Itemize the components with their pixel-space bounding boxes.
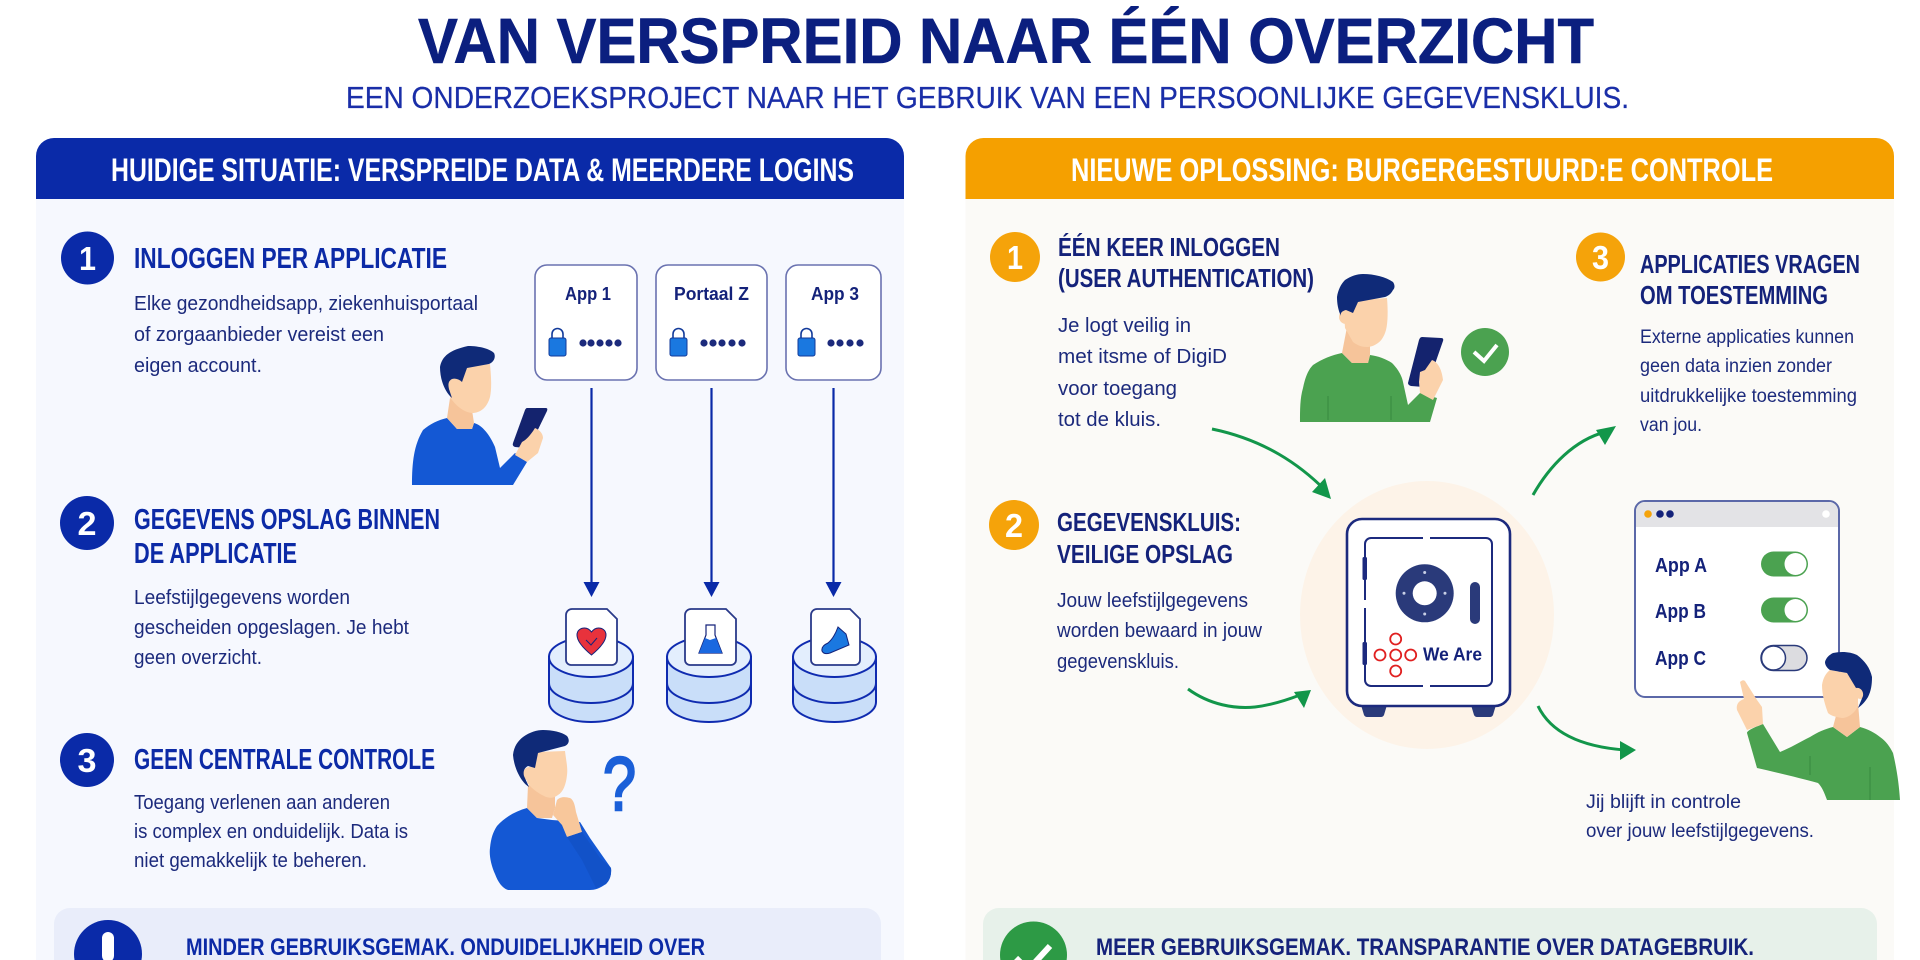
toggle: App C: App C xyxy=(1655,648,1706,670)
browser window with toggles xyxy=(1635,501,1839,697)
step 2: gegevenskluis: worden bewaard in jouw xyxy=(1056,620,1263,642)
step 3: applicaties vragen om toestemming: uitdrukkelijke toestemming xyxy=(1640,386,1857,407)
step 1: inloggen per applicatie: INLOGGEN PER APPLICATIE xyxy=(134,243,447,275)
step 2: gegevenskluis: Jouw leefstijlgegevens xyxy=(1057,590,1248,612)
step 2: gegevenskluis: 2 xyxy=(1005,507,1023,544)
step 3: applicaties vragen om toestemming: van jou. xyxy=(1640,415,1702,436)
step 3: geen centrale controle: Toegang verlenen aan anderen xyxy=(134,792,390,814)
step 1: één keer inloggen: voor toegang xyxy=(1058,378,1177,400)
toggle: App B xyxy=(1655,598,1808,623)
step 1: inloggen per applicatie: eigen account. xyxy=(134,355,262,377)
arrow: app 1 to database xyxy=(584,388,600,597)
step 1: inloggen per applicatie: 1 xyxy=(79,240,96,277)
icon: person with phone, green xyxy=(1300,274,1443,422)
step 2: gegevens opslag: 2 xyxy=(78,505,96,542)
panel header: huidige situatie: HUIDIGE SITUATIE: VERSPREIDE DATA & MEERDERE LOGINS xyxy=(111,152,854,188)
app card 2 xyxy=(656,265,767,380)
step 3: geen centrale controle: niet gemakkelijk te beheren. xyxy=(134,850,367,872)
step 1: inloggen per applicatie: Elke gezondheidsapp, ziekenhuisportaal xyxy=(134,293,478,315)
arrow: app 3 to database xyxy=(826,388,842,597)
step 2: gegevenskluis xyxy=(989,500,1263,673)
step 3: geen centrale controle xyxy=(60,733,435,872)
step 3: geen centrale controle: GEEN CENTRALE CONTROLE xyxy=(134,744,435,776)
callout: minder gebruiksgemak xyxy=(54,908,881,960)
step 2: gegevens opslag: Leefstijlgegevens worden xyxy=(134,587,350,609)
icon: green check badge xyxy=(1461,328,1509,376)
step 3: applicaties vragen om toestemming xyxy=(1576,232,1860,436)
step 1: één keer inloggen: ÉÉN KEER INLOGGEN xyxy=(1058,232,1280,262)
step 2: gegevens opslag: geen overzicht. xyxy=(134,647,262,669)
app card 1: App 1 xyxy=(565,284,611,304)
arrow: login to vault xyxy=(1212,429,1331,499)
vault glow xyxy=(1300,481,1554,749)
text: jij blijft in controle: Jij blijft in controle xyxy=(1586,792,1741,813)
step 2: gegevens opslag xyxy=(60,496,440,669)
step 2: gegevenskluis: gegevenskluis. xyxy=(1057,651,1179,673)
title: VAN VERSPREID NAAR ÉÉN OVERZICHT xyxy=(418,5,1594,77)
subtitle: EEN ONDERZOEKSPROJECT NAAR HET GEBRUIK VAN EEN PERSOONLIJKE GEGEVENSKLUIS. xyxy=(346,80,1629,115)
step 3: applicaties vragen om toestemming: OM TOESTEMMING xyxy=(1640,280,1828,310)
icon: question mark: ? xyxy=(603,742,636,827)
step 1: één keer inloggen: 1 xyxy=(1007,239,1023,276)
step 1: inloggen per applicatie: of zorgaanbieder vereist een xyxy=(134,324,384,346)
arrow: vault to control xyxy=(1538,706,1636,760)
panel: nieuwe oplossing xyxy=(966,138,1900,960)
icon: person pointing xyxy=(1737,652,1900,800)
app card 3 xyxy=(786,265,881,380)
icon: vault xyxy=(1347,519,1510,717)
logo: We Are: We Are xyxy=(1423,644,1482,664)
database with flask file xyxy=(667,609,751,722)
icon: person with phone xyxy=(412,346,547,485)
step 1: één keer inloggen: (USER AUTHENTICATION) xyxy=(1058,263,1314,293)
arrow: vault to applications xyxy=(1533,426,1616,495)
step 2: gegevenskluis: VEILIGE OPSLAG xyxy=(1057,539,1233,569)
text: jij blijft in controle: over jouw leefstijlgegevens. xyxy=(1586,821,1814,842)
text: jij blijft in controle xyxy=(1586,792,1814,842)
panel: huidige situatie xyxy=(36,138,904,960)
database with heart file xyxy=(549,609,633,722)
step 3: geen centrale controle: is complex en onduidelijk. Data is xyxy=(134,821,408,843)
toggle: App B: App B xyxy=(1655,601,1706,623)
toggle: App A xyxy=(1655,552,1808,577)
database with shoe file xyxy=(793,609,876,722)
callout: meer gebruiksgemak xyxy=(983,908,1877,960)
panel header: nieuwe oplossing xyxy=(966,138,1894,199)
step 2: gegevenskluis: GEGEVENSKLUIS: xyxy=(1057,507,1241,537)
toggle: App A: App A xyxy=(1655,555,1707,577)
step 3: geen centrale controle: 3 xyxy=(78,742,96,779)
step 1: inloggen per applicatie xyxy=(61,232,478,377)
step 1: één keer inloggen: met itsme of DigiD xyxy=(1058,346,1227,368)
step 3: applicaties vragen om toestemming: geen data inzien zonder xyxy=(1640,356,1833,377)
step 3: applicaties vragen om toestemming: APPLICATIES VRAGEN xyxy=(1640,249,1860,279)
step 2: gegevens opslag: DE APPLICATIE xyxy=(134,538,297,570)
app card 2: Portaal Z xyxy=(674,284,749,304)
step 1: één keer inloggen xyxy=(990,232,1314,431)
arrow: storage to vault xyxy=(1188,689,1311,708)
step 3: applicaties vragen om toestemming: 3 xyxy=(1592,239,1609,276)
toggle: App C xyxy=(1655,646,1807,670)
step 1: één keer inloggen: tot de kluis. xyxy=(1058,409,1161,431)
step 1: één keer inloggen: Je logt veilig in xyxy=(1058,315,1191,337)
app card 1 xyxy=(535,265,637,380)
panel header: huidige situatie xyxy=(36,138,904,199)
step 2: gegevens opslag: GEGEVENS OPSLAG BINNEN xyxy=(134,504,440,536)
step 3: applicaties vragen om toestemming: Externe applicaties kunnen xyxy=(1640,327,1854,348)
icon: thinking person xyxy=(490,730,611,890)
step 2: gegevens opslag: gescheiden opgeslagen. Je hebt xyxy=(134,617,409,639)
logo: We Are xyxy=(1374,634,1482,676)
app card 3: App 3 xyxy=(811,284,859,304)
arrow: portaal to database xyxy=(704,388,720,597)
